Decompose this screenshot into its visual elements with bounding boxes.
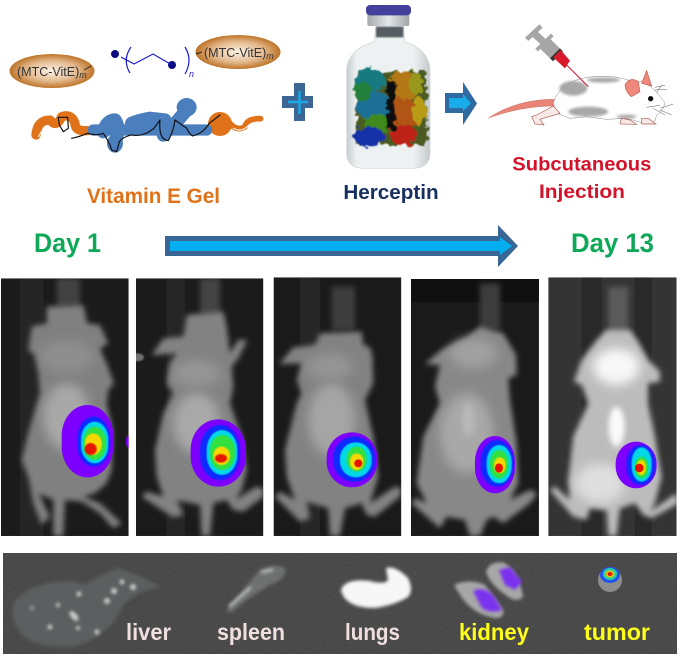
syringe [527,26,588,87]
label: Day 13: Day 13 [571,228,654,258]
polymer repeat unit [111,47,194,79]
panel: mouse image 2 [131,278,265,536]
mouse legs [532,106,656,125]
panel: imaging series [1,277,678,536]
mouse eye [648,96,653,101]
panel: mouse image 4 [411,279,539,536]
panel: mouse with syringe [488,26,673,203]
vial rubber stopper [376,27,403,37]
oval: right MTC-VitE micelle: (MTC-VitE) [204,46,266,60]
protein structure [354,68,427,147]
label: Subcutaneous Injection: Subcutaneous [512,153,651,175]
polymer repeat unit: n [189,69,194,79]
gel chain: orange ends and blue core [36,98,261,153]
label: liver: liver [126,619,171,645]
label: Herceptin: Herceptin [343,182,439,204]
organ: lungs [341,567,411,608]
label: Vitamin E Gel: Vitamin E Gel [87,185,220,208]
organ: spleen [226,566,285,612]
panel: mouse image day 13 [548,277,678,536]
label: Day 1: Day 1 [34,228,101,258]
panel: ex vivo organs [3,553,677,654]
mouse fur shading [559,77,637,119]
organ: tumor [598,567,622,592]
label: spleen: spleen [217,619,285,645]
mouse tail [488,99,557,118]
panel: mouse image day 1 [1,278,130,536]
oval: left MTC-VitE micelle: m [79,70,87,80]
panel: Herceptin vial [343,5,439,204]
mouse body [553,76,665,124]
vial blue cap [366,5,411,15]
icon: plus sign [282,83,313,121]
oval: right MTC-VitE micelle [196,35,280,69]
mouse ears [625,71,652,97]
oval: right MTC-VitE micelle: m [266,51,274,61]
oval: left MTC-VitE micelle [10,54,94,88]
label: kidney: kidney [459,619,529,645]
arrow: vial to mouse [445,82,477,125]
panel: Vitamin E gel schematic [10,35,280,208]
oval: left MTC-VitE micelle: (MTC-VitE) [17,65,79,79]
organ: liver [12,568,161,647]
mouse whiskers [647,85,673,115]
label: Subcutaneous Injection: Injection [539,181,625,203]
vial glass body [347,27,430,168]
label: tumor: tumor [584,619,650,645]
arrow: timeline [165,225,518,267]
panel: mouse image 3 [274,277,402,536]
vial metal collar [367,14,409,26]
label: lungs: lungs [345,619,400,645]
organ: kidneys [454,562,523,618]
